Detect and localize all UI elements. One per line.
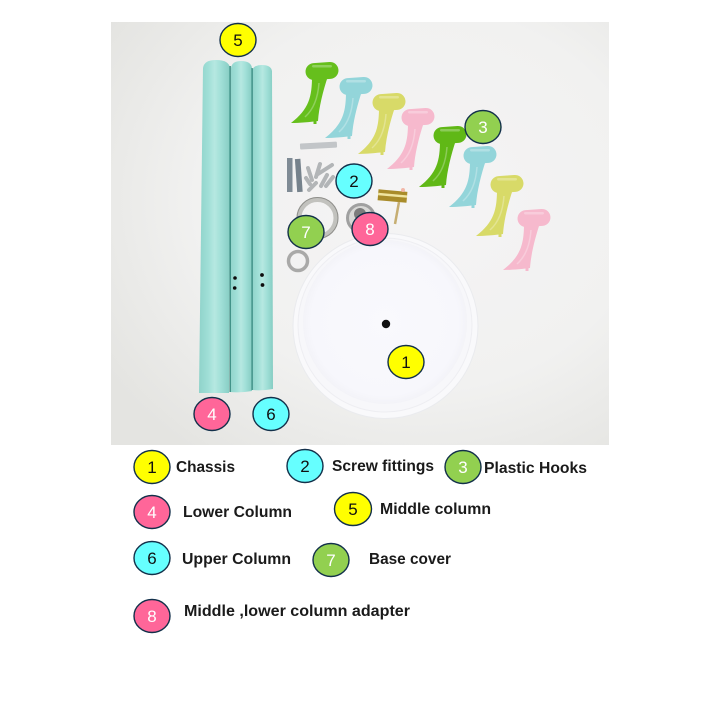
- column: lower: [199, 60, 230, 393]
- rings: base cover parts: [288, 198, 338, 270]
- legend: [134, 450, 587, 632]
- marker 4: 4: [207, 405, 217, 424]
- legend item 1: Chassis: [134, 450, 235, 484]
- marker 3: [465, 110, 501, 144]
- marker 5: [220, 24, 256, 56]
- chassis disc: [293, 234, 478, 418]
- column: middle: [230, 61, 252, 392]
- marker 7: 7: [301, 223, 311, 242]
- legend item 5: Middle column: 5: [348, 500, 358, 519]
- plastic hooks: [291, 61, 551, 271]
- legend item 8: Middle, lower column adapter: 8: [147, 607, 157, 626]
- screw fittings: [287, 142, 337, 192]
- marker 5: 5: [233, 31, 243, 50]
- legend item 3: Plastic Hooks: 3: [458, 458, 468, 477]
- marker 2: 2: [349, 172, 359, 191]
- legend item 5: Middle column: Middle column: [380, 501, 491, 518]
- legend item 4: Lower Column: Lower Column: [183, 504, 292, 521]
- legend item 7: Base cover: [313, 544, 451, 576]
- legend item 2: Screw fittings: 2: [300, 457, 310, 476]
- marker 3: 3: [478, 118, 488, 137]
- legend item 6: Upper Column: Upper Column: [182, 551, 291, 568]
- legend item 4: Lower Column: 4: [147, 503, 157, 522]
- column: upper: [252, 65, 273, 390]
- marker 8: [352, 212, 388, 246]
- marker 1: 1: [401, 353, 411, 372]
- legend item 2: Screw fittings: [287, 450, 434, 482]
- legend item 8: Middle, lower column adapter: Middle ,lower column adapter: [184, 603, 410, 620]
- marker 6: [253, 398, 289, 430]
- legend item 7: Base cover: 7: [326, 551, 336, 570]
- legend item 4: Lower Column: [134, 496, 292, 528]
- legend item 6: Upper Column: 6: [147, 549, 157, 568]
- marker 8: 8: [365, 220, 375, 239]
- marker 1: [388, 346, 424, 378]
- legend item 1: Chassis: Chassis: [176, 459, 235, 476]
- legend item 7: Base cover: Base cover: [369, 551, 451, 568]
- photo panel: disassembled parts: [111, 22, 609, 445]
- legend item 2: Screw fittings: Screw fittings: [332, 458, 434, 475]
- legend item 5: Middle column: [334, 492, 491, 526]
- legend item 8: Middle, lower column adapter: [134, 600, 410, 632]
- legend item 3: Plastic Hooks: Plastic Hooks: [484, 460, 587, 477]
- marker 4: [194, 398, 230, 430]
- marker 2: [336, 164, 372, 198]
- legend item 6: Upper Column: [134, 542, 291, 574]
- brass adapter pin: [378, 188, 407, 224]
- legend item 3: Plastic Hooks: [445, 450, 587, 484]
- legend item 1: Chassis: 1: [147, 458, 157, 477]
- marker 7: [288, 216, 324, 248]
- adapter ring: [348, 204, 374, 232]
- marker 6: 6: [266, 405, 276, 424]
